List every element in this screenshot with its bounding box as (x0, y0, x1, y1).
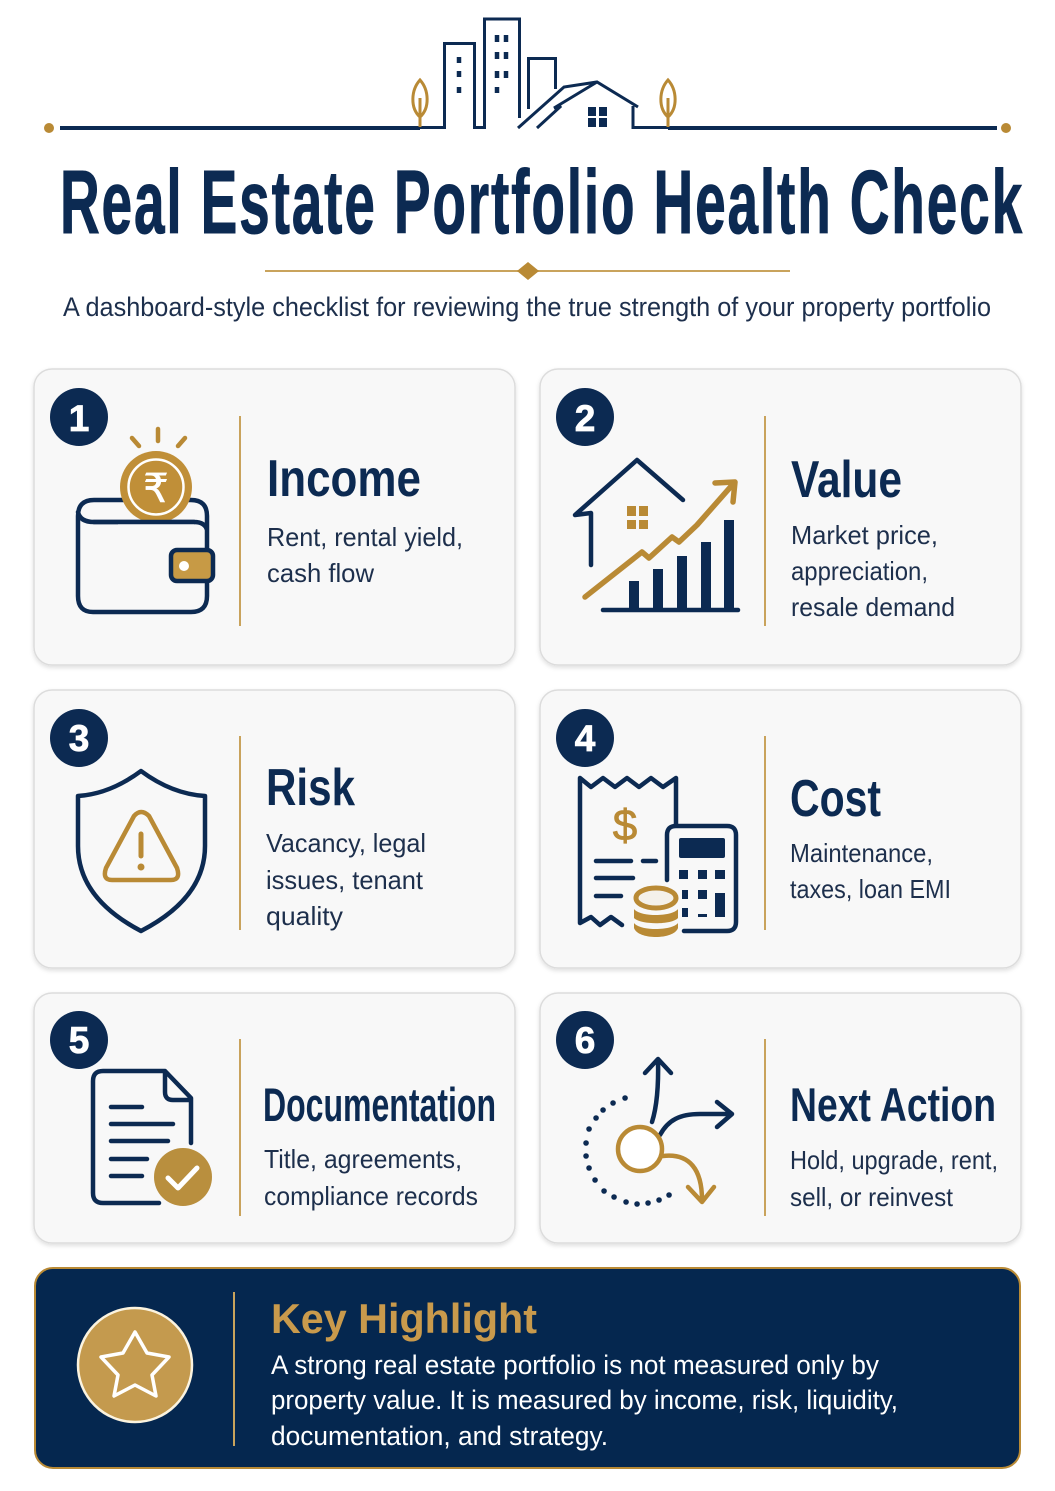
icon: star medal (78, 1308, 192, 1422)
text: income details: Rent, rental yield, (267, 522, 463, 552)
panel: documentation (34, 993, 515, 1243)
text: cost details: taxes, loan EMI (790, 874, 951, 904)
icon: branching arrows (586, 1059, 732, 1204)
heading: risk: Risk (266, 759, 355, 817)
text: key highlight body: documentation, and strategy. (271, 1421, 608, 1451)
text: next action details: sell, or reinvest (790, 1182, 954, 1212)
panel: income (34, 369, 515, 665)
badge 6: 6 (575, 1020, 595, 1061)
text: key highlight body: property value. It is measured by income, risk, liquidity, (271, 1385, 898, 1415)
heading: next action: Next Action (790, 1078, 996, 1131)
heading: key highlight: Key Highlight (271, 1295, 537, 1342)
icon: wallet with rupee coin (78, 429, 213, 612)
badge 3 (50, 709, 108, 767)
icon: wallet with rupee coin: ₹ (143, 466, 169, 512)
badge 3: 3 (69, 718, 89, 759)
badge 1 (50, 388, 108, 446)
icon: shield with warning (78, 771, 205, 931)
badge 6 (556, 1011, 614, 1069)
header skyline illustration (44, 19, 1011, 133)
text: documentation details: compliance records (264, 1181, 478, 1211)
icon: receipt, calculator and coins: $ (613, 801, 637, 850)
badge 2: 2 (575, 398, 595, 439)
text: next action details: Hold, upgrade, rent, (790, 1145, 998, 1175)
text: value details: appreciation, (791, 556, 928, 586)
text: risk details: issues, tenant (266, 865, 424, 895)
panel: risk (34, 690, 515, 968)
panel: next action (540, 993, 1021, 1243)
subtitle: A dashboard-style checklist for reviewing the true strength of your property portfolio (63, 292, 991, 322)
text: key highlight body: A strong real estate portfolio is not measured only by (271, 1350, 879, 1380)
text: cost details: Maintenance, (790, 838, 933, 868)
title divider (265, 262, 790, 280)
panel: cost (540, 690, 1021, 968)
icon: document with check (93, 1071, 212, 1206)
badge 2 (556, 388, 614, 446)
text: risk details: quality (266, 901, 343, 931)
text: income details: cash flow (267, 558, 374, 588)
text: value details: resale demand (791, 592, 955, 622)
panel: key highlight (35, 1268, 1020, 1468)
badge 4: 4 (575, 718, 596, 759)
heading: cost: Cost (790, 770, 881, 828)
badge 5 (50, 1011, 108, 1069)
heading: documentation: Documentation (263, 1078, 496, 1131)
heading: value: Value (791, 451, 902, 509)
icon: house with growth chart (575, 460, 738, 610)
badge 4 (556, 709, 614, 767)
icon: receipt, calculator and coins (580, 778, 736, 938)
text: value details: Market price, (791, 520, 938, 550)
text: risk details: Vacancy, legal (266, 828, 426, 858)
badge 5: 5 (69, 1020, 89, 1061)
panel: value (540, 369, 1021, 665)
heading: income: Income (267, 450, 421, 508)
badge 1: 1 (69, 398, 89, 439)
text: documentation details: Title, agreements, (264, 1144, 462, 1174)
